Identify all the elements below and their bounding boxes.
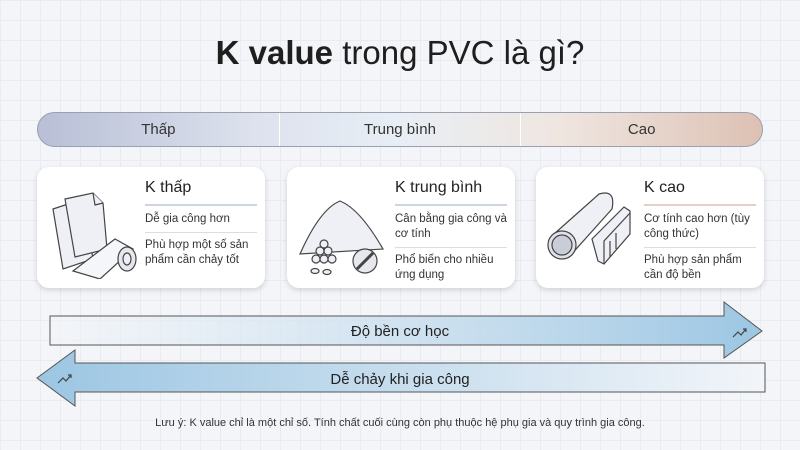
panel: K thấp: [37, 167, 265, 288]
scale bar: Thấp: [141, 121, 175, 138]
panel: K cao: [536, 167, 764, 288]
scale bar: [37, 112, 763, 147]
panel: K cao: Phù hợp sản phẩm cần độ bền: [644, 254, 742, 281]
icon: powder and pellets: [299, 200, 384, 276]
panel: K thấp: Phù hợp một số sản phẩm cần chảy tốt: [145, 239, 248, 266]
scale bar: Trung bình: [364, 121, 436, 138]
panel: K cao: Cơ tính cao hơn (tùy công thức): [644, 213, 750, 240]
panel: K cao: K cao: [644, 179, 685, 196]
scale bar: Cao: [628, 121, 655, 138]
arrow: Dễ chảy khi gia công: Dễ chảy khi gia công: [330, 371, 470, 388]
panel: K trung bình: K trung bình: [395, 179, 482, 196]
icon: pipe and profile: [547, 192, 631, 265]
panel: K thấp: Dễ gia công hơn: [145, 213, 230, 225]
title: K value trong PVC là gì?: [216, 34, 584, 71]
icon: sheets and roll: [52, 192, 137, 279]
panel: K trung bình: Cân bằng gia công và cơ tính: [395, 213, 507, 240]
footnote: Lưu ý: K value chỉ là một chỉ số. Tính chất cuối cùng còn phụ thuộc hệ phụ gia và quy trình gia công.: [155, 417, 645, 429]
heading: [145, 179, 257, 206]
panel: K trung bình: Phổ biến cho nhiều ứng dụng: [395, 254, 493, 281]
heading: K thấp: [145, 179, 191, 196]
arrow: Độ bền cơ học: Độ bền cơ học: [351, 323, 450, 340]
panel: K trung bình: [287, 167, 515, 288]
